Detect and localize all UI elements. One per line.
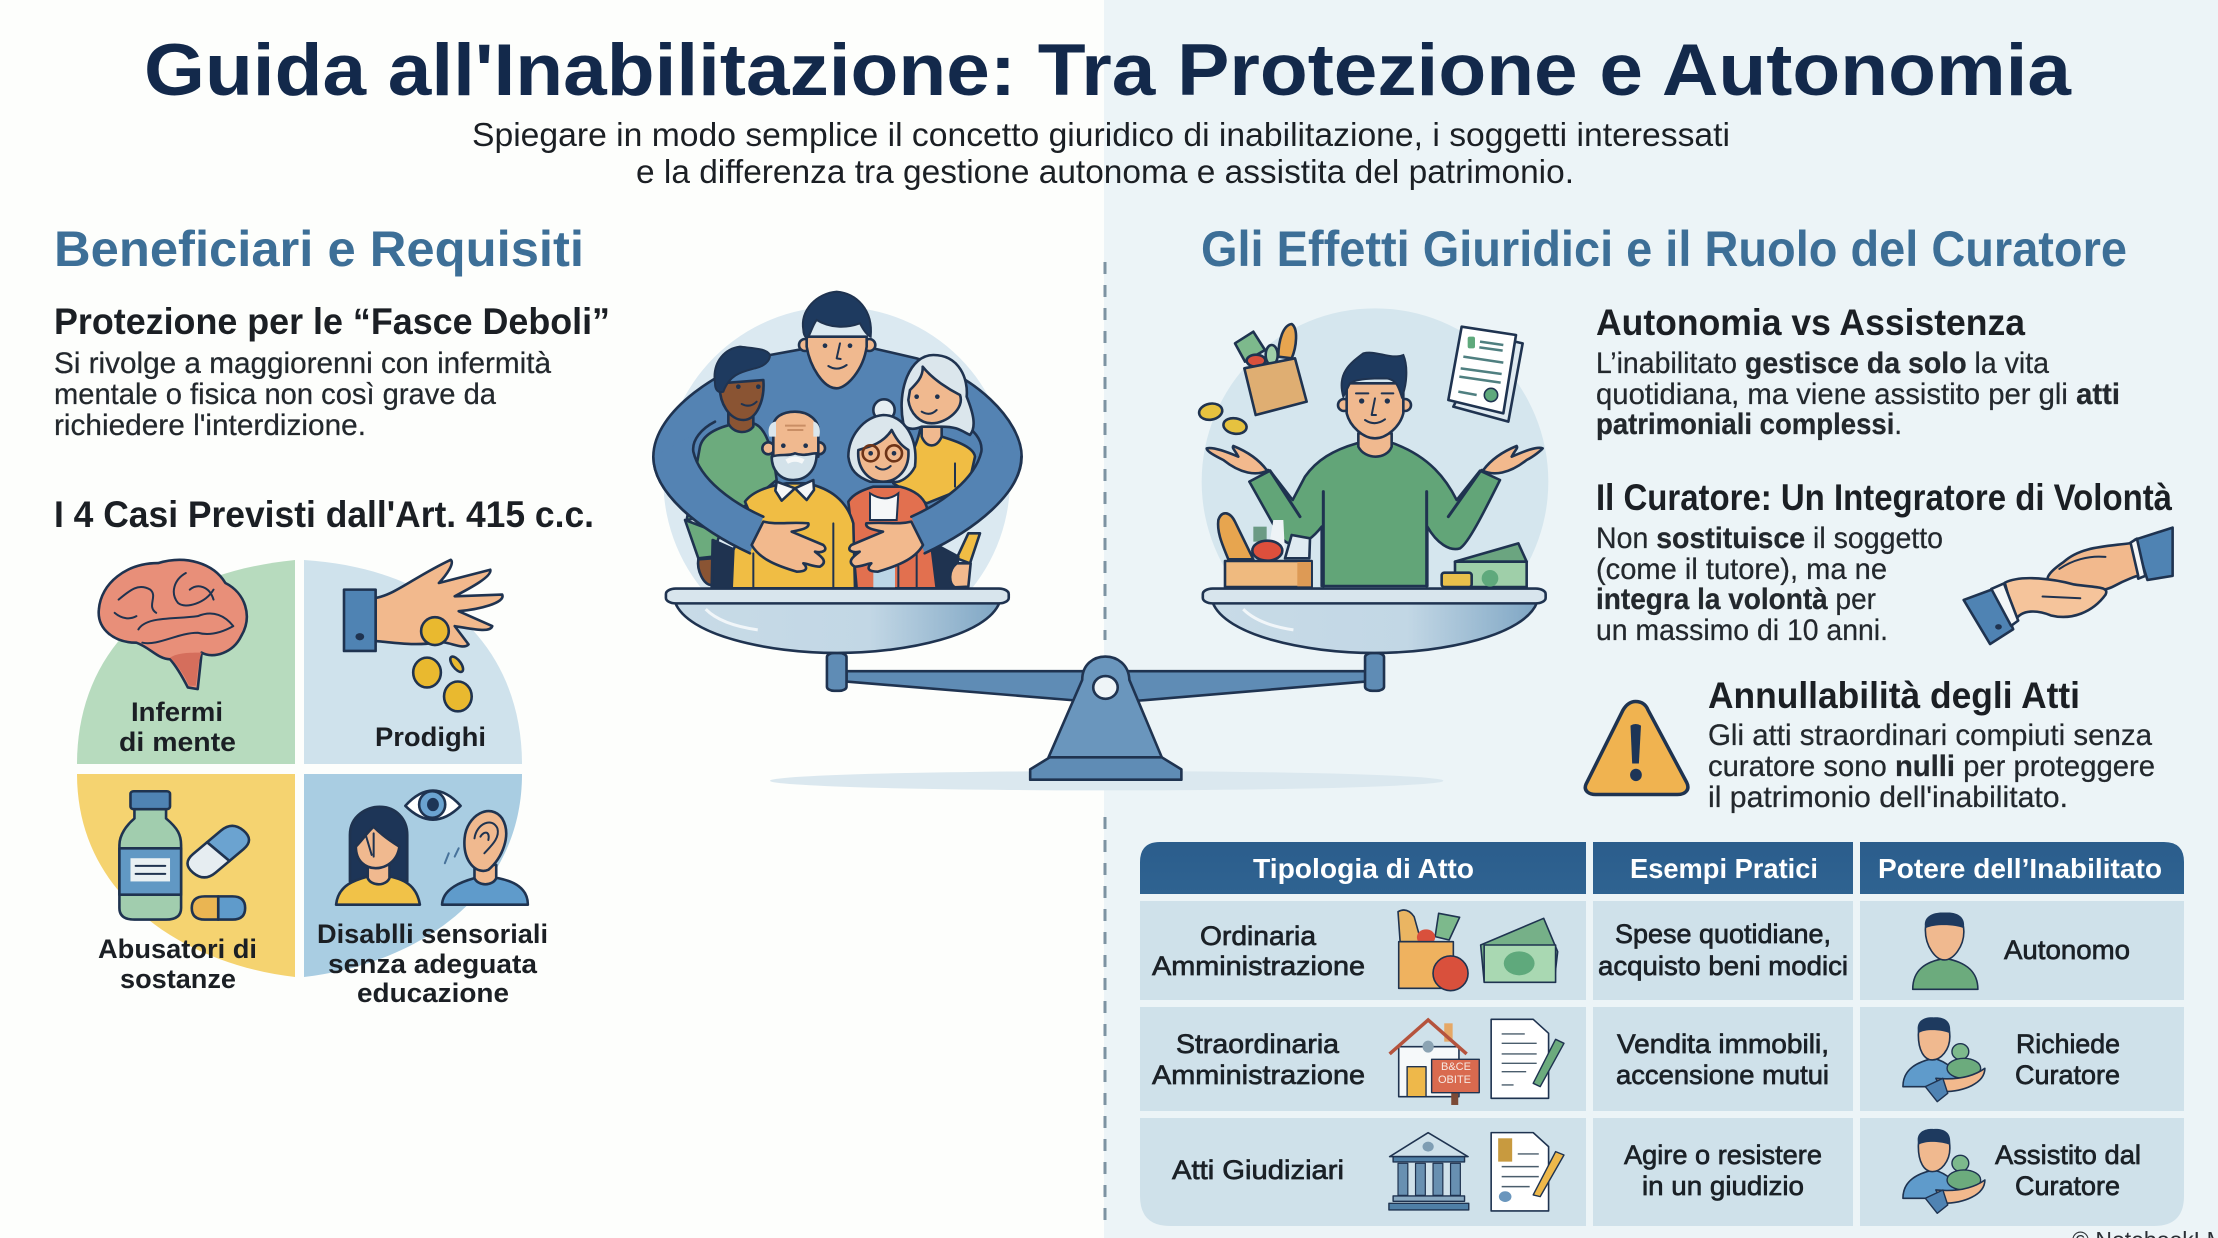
icon: courthouse: [1389, 1133, 1469, 1210]
label: abusatori di sostanze: Abusatori di: [98, 934, 257, 964]
text block: annullabilità: Gli atti straordinari compiuti senza: [1708, 719, 2152, 752]
subtitle: Spiegare in modo semplice il concetto giuridico di inabilitazione, i soggetti interessati: [472, 116, 1730, 153]
label: infermi di mente: [119, 697, 236, 757]
money and coins: [1442, 543, 1527, 587]
woman head: [922, 423, 942, 445]
text block: fasce deboli: Protezione per le “Fasce Deboli”: [54, 301, 610, 342]
illustration: independent man: [1198, 308, 1548, 588]
quadrant: prodighi: [304, 560, 522, 764]
icon: person with curator 1: [1903, 1017, 1985, 1102]
table row: straordinaria: Vendita immobili,: [1617, 1029, 1829, 1059]
text block: autonomia: patrimoniali complessi.: [1596, 408, 1902, 441]
table row: straordinaria: Straordinaria: [1176, 1029, 1340, 1059]
young man head: [728, 413, 753, 432]
young man body: [687, 423, 777, 520]
label: disabili sensoriali: [317, 919, 548, 1008]
text block: curatore: (come il tutore), ma ne: [1596, 553, 1887, 586]
icon: house for sale and document: [1390, 1019, 1564, 1105]
icon: sensory disabilities: [336, 791, 528, 905]
flying bag: [1235, 324, 1307, 415]
illustration: family protected: [652, 290, 1023, 588]
torso and arms: [1249, 443, 1500, 586]
text block: fasce deboli: Si rivolge a maggiorenni con infermità: [54, 347, 551, 380]
table row: ordinaria: Spese quotidiane,: [1615, 919, 1831, 949]
table row: ordinaria: Amministrazione: [1152, 951, 1365, 981]
icon: bottle and pills: [119, 791, 255, 920]
table row: giudiziari: Assistito dal: [1995, 1140, 2141, 1170]
label: infermi di mente: di mente: [119, 727, 236, 757]
right arm: [911, 422, 1021, 553]
icon: person autonomous: [1913, 912, 1978, 989]
subtitle: e la differenza tra gestione autonoma e assistita del patrimonio.: [636, 153, 1574, 190]
left arm: [653, 422, 763, 553]
icon: legal document: [1491, 1133, 1564, 1211]
text block: curatore: [1596, 477, 2172, 647]
text block: annullabilità: [1708, 675, 2155, 814]
old man head: [762, 442, 774, 454]
icon: brain: [99, 560, 247, 689]
illustration: scale: [666, 589, 1546, 790]
text block: fasce deboli: mentale o fisica non così grave da: [54, 378, 496, 411]
table row: straordinaria: Curatore: [2015, 1060, 2120, 1090]
old woman body: [848, 487, 937, 588]
quadrant: abusatori: [77, 774, 295, 977]
table row: straordinaria: accensione mutui: [1616, 1060, 1829, 1090]
groceries box: [1218, 513, 1312, 587]
icon: hand with coins: [344, 560, 503, 711]
title: Guida all'Inabilitazione: Tra Protezione e Autonomia: [144, 30, 2072, 111]
table: [1140, 842, 2184, 1226]
woman body: [893, 430, 975, 503]
text block: autonomia: L’inabilitato gestisce da solo la vita: [1596, 347, 2049, 380]
icon: groceries and money: [1398, 910, 1558, 991]
fulcrum: [1030, 657, 1181, 780]
table row: giudiziari: Atti Giudiziari: [1172, 1155, 1344, 1185]
big torso: [653, 348, 1022, 553]
table row: giudiziari: Curatore: [2015, 1171, 2120, 1201]
heading: effetti giuridici: Gli Effetti Giuridici e il Ruolo del Curatore: [1201, 221, 2127, 277]
flying document: [1448, 327, 1523, 422]
label: abusatori di sostanze: sostanze: [120, 964, 236, 994]
text block: fasce deboli: [54, 301, 610, 442]
table row: ordinaria: [1140, 901, 2184, 1000]
sign text: B&CE: [1441, 1061, 1471, 1073]
table header: Esempi Pratici: [1630, 853, 1818, 884]
text block: annullabilità: curatore sono nulli per proteggere: [1708, 750, 2155, 783]
table row: straordinaria: Richiede: [2016, 1029, 2120, 1059]
table header: Potere dell’Inabilitato: [1878, 853, 2162, 884]
text block: curatore: Non sostituisce il soggetto: [1596, 522, 1943, 555]
icon: person with curator 2: [1903, 1129, 1985, 1213]
text block: fasce deboli: richiedere l'interdizione.: [54, 409, 366, 442]
label: abusatori di sostanze: [98, 934, 257, 994]
text block: curatore: integra la volontà per: [1596, 583, 1876, 616]
hands: [752, 522, 825, 572]
label: infermi di mente: Infermi: [131, 697, 223, 727]
icon: handshake: [1964, 528, 2173, 644]
shadow: [770, 771, 1443, 790]
heading: 4 casi: I 4 Casi Previsti dall'Art. 415 c.c.: [54, 494, 594, 535]
icon: warning: [1585, 702, 1688, 795]
label: disabili sensoriali: senza adeguata: [328, 949, 538, 979]
text block: autonomia: [1596, 302, 2120, 441]
table row: giudiziari: in un giudizio: [1642, 1171, 1804, 1201]
main man head: [799, 339, 811, 351]
divider: [1104, 262, 1106, 1222]
table row: ordinaria: acquisto beni modici: [1598, 951, 1848, 981]
text block: autonomia: quotidiana, ma viene assistito per gli atti: [1596, 378, 2120, 411]
right pan: [1203, 589, 1546, 653]
panel: quadrants: [77, 560, 548, 1008]
old woman head: [873, 399, 895, 421]
left pan: [666, 589, 1009, 653]
table header: [1140, 842, 2184, 894]
beam: [827, 653, 1384, 700]
label: disabili sensoriali: educazione: [357, 978, 509, 1008]
label: disabili sensoriali: Disablli sensoriali: [317, 919, 548, 949]
label: prodighi: Prodighi: [375, 722, 486, 752]
text block: annullabilità: Annullabilità degli Atti: [1708, 675, 2080, 716]
subtitle: [472, 116, 1730, 190]
sign text: OBITE: [1438, 1074, 1471, 1086]
table row: ordinaria: Ordinaria: [1200, 921, 1317, 951]
background: left panel: [0, 0, 1104, 1238]
table row: straordinaria: Amministrazione: [1152, 1060, 1365, 1090]
text block: annullabilità: il patrimonio dell'inabilitato.: [1708, 781, 2068, 814]
table row: giudiziari: [1140, 1118, 2184, 1226]
text block: autonomia: Autonomia vs Assistenza: [1596, 302, 2025, 343]
quadrant: infermi di mente: [77, 560, 295, 764]
flying coins: [1198, 402, 1248, 436]
old man body: [732, 483, 855, 588]
neck and head: [1358, 433, 1392, 457]
table row: straordinaria: [1140, 1007, 2184, 1111]
hand right: [1482, 446, 1543, 473]
table row: giudiziari: Agire o resistere: [1624, 1140, 1822, 1170]
table header: Tipologia di Atto: [1253, 853, 1474, 884]
background: right panel: [1104, 0, 2218, 1238]
quadrant: disabili: [304, 774, 522, 977]
table row: ordinaria: Autonomo: [2004, 935, 2130, 965]
text block: curatore: un massimo di 10 anni.: [1596, 614, 1888, 647]
hand left: [1207, 446, 1268, 473]
heading: beneficiari: Beneficiari e Requisiti: [54, 221, 584, 277]
sign text: [1438, 1061, 1471, 1086]
